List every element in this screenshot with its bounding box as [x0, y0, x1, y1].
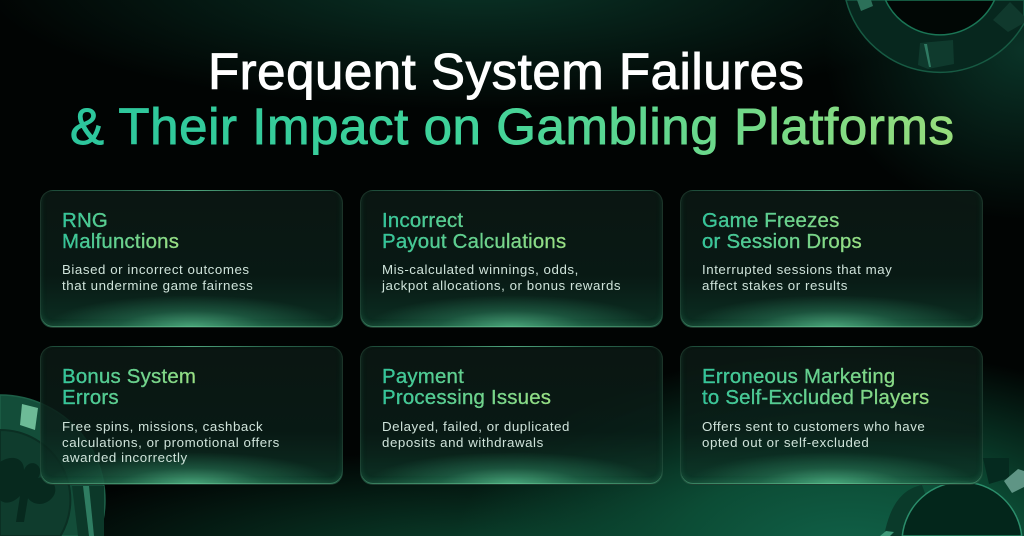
icon: clover poker chip bottom left — [0, 394, 106, 536]
description: that undermine game fairness — [62, 278, 253, 293]
heading: Payout Calculations — [382, 231, 566, 253]
description: deposits and withdrawals — [382, 435, 544, 450]
heading: Payment — [382, 366, 464, 388]
icon: poker chip bottom right — [880, 458, 1024, 536]
panel: payment processing issues — [360, 346, 663, 485]
description — [702, 419, 925, 450]
description: calculations, or promotional offers — [62, 435, 280, 450]
panel: RNG malfunctions — [40, 190, 343, 328]
heading: Errors — [62, 387, 119, 409]
description — [62, 419, 280, 465]
panel: incorrect payout calculations — [360, 190, 663, 328]
description: awarded incorrectly — [62, 450, 188, 465]
heading: to Self-Excluded Players — [702, 387, 929, 409]
description — [62, 262, 253, 293]
heading: or Session Drops — [702, 231, 862, 253]
heading: RNG — [62, 210, 108, 232]
description: affect stakes or results — [702, 278, 848, 293]
heading — [382, 211, 566, 253]
panel: bonus system errors — [40, 346, 343, 485]
title line 2: & Their Impact on Gambling Platforms — [70, 98, 954, 155]
heading — [702, 367, 929, 409]
heading: Game Freezes — [702, 210, 840, 232]
description — [382, 419, 570, 450]
heading: Malfunctions — [62, 231, 179, 253]
heading: Processing Issues — [382, 387, 551, 409]
heading: Bonus System — [62, 366, 196, 388]
description: Interrupted sessions that may — [702, 262, 892, 277]
description — [382, 262, 621, 293]
description: Free spins, missions, cashback — [62, 419, 263, 434]
panel: erroneous marketing — [680, 346, 983, 485]
heading — [702, 211, 862, 253]
description: Biased or incorrect outcomes — [62, 262, 250, 277]
description: opted out or self-excluded — [702, 435, 869, 450]
description: Delayed, failed, or duplicated — [382, 419, 570, 434]
description — [702, 262, 892, 293]
heading — [62, 367, 196, 409]
description: Offers sent to customers who have — [702, 419, 925, 434]
description: Mis-calculated winnings, odds, — [382, 262, 579, 277]
heading: Incorrect — [382, 210, 463, 232]
title line 1: Frequent System Failures — [208, 43, 804, 100]
description: jackpot allocations, or bonus rewards — [382, 278, 621, 293]
heading: Erroneous Marketing — [702, 366, 895, 388]
panel: game freezes — [680, 190, 983, 328]
heading — [62, 211, 179, 253]
heading — [382, 367, 551, 409]
title — [70, 43, 954, 155]
icon: poker chip top right — [845, 0, 1024, 74]
